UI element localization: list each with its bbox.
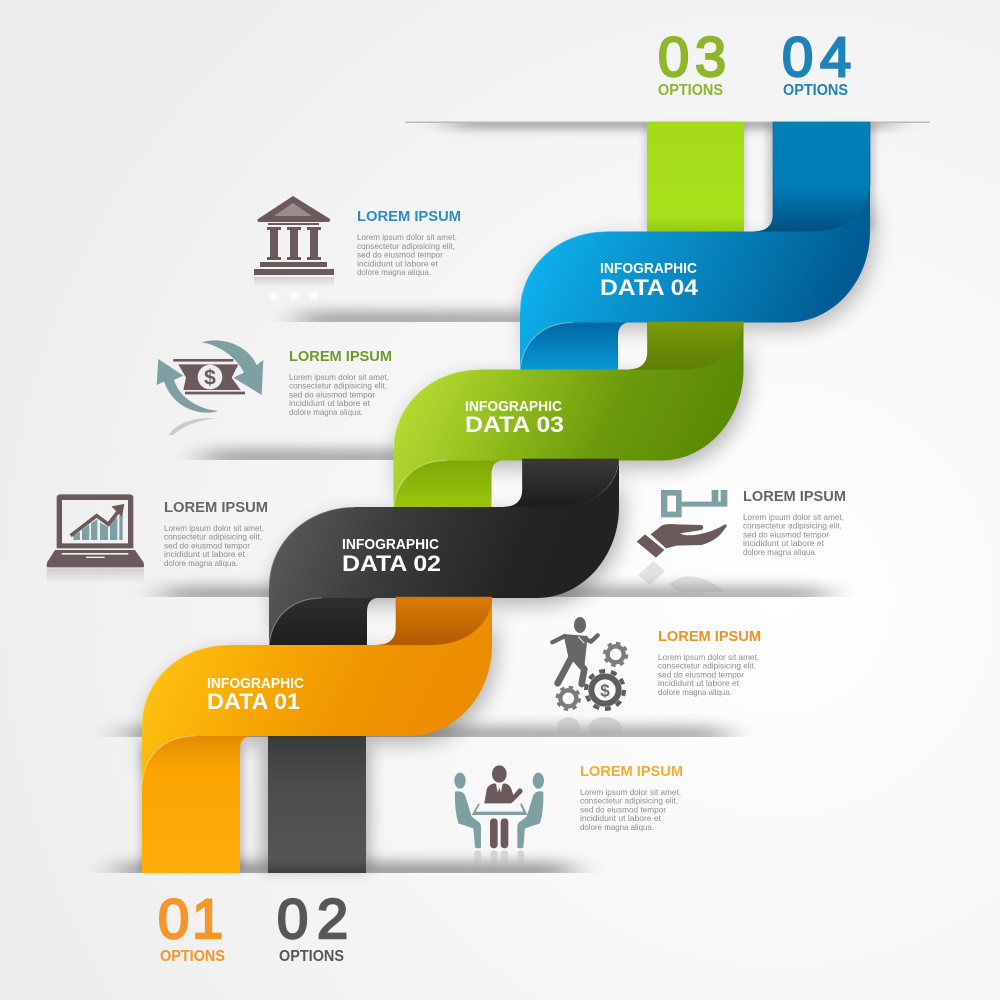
icon: hand holding key	[637, 490, 727, 592]
dark ribbon band	[269, 460, 619, 647]
dark ribbon vertical strip	[268, 736, 366, 873]
text block: green lorem ipsum: Lorem ipsum dolor sit amet,	[289, 372, 389, 382]
text block: green lorem ipsum: consectetur adipisicing elit,	[289, 381, 387, 391]
label: infographic data 02: DATA 02	[342, 551, 441, 576]
text block: orange lorem ipsum: dolore magna aliqua.	[658, 687, 732, 697]
text block: yellow lorem ipsum	[580, 764, 683, 832]
option 04 heading: OPTIONS	[783, 82, 848, 99]
option 01 heading: 01	[158, 887, 223, 950]
option 01 heading: OPTIONS	[160, 948, 225, 965]
label: infographic data 04: DATA 04	[600, 275, 699, 300]
text block: blue lorem ipsum: sed do eiusmod tempor	[357, 250, 443, 260]
green ribbon lower fold	[394, 460, 502, 510]
text block: gray lorem ipsum: incididunt ut labore et	[164, 549, 246, 559]
text block: key lorem ipsum: sed do eiusmod tempor	[743, 529, 829, 539]
green straight ribbon top	[647, 122, 744, 232]
blue ribbon band	[520, 184, 870, 372]
label: infographic data 03: INFOGRAPHIC	[465, 398, 562, 415]
text block: key lorem ipsum: LOREM IPSUM	[743, 489, 846, 505]
label: infographic data 01: INFOGRAPHIC	[207, 675, 304, 692]
text block: yellow lorem ipsum: LOREM IPSUM	[580, 764, 683, 780]
blue ribbon lower fold	[520, 322, 628, 372]
orange ribbon upper fold	[378, 597, 492, 645]
text block: orange lorem ipsum: consectetur adipisicing elit,	[658, 661, 756, 671]
dark ribbon lower fold	[269, 598, 377, 647]
icon: people meeting at table	[454, 765, 544, 867]
text block: blue lorem ipsum: LOREM IPSUM	[357, 209, 461, 225]
text block: blue lorem ipsum: consectetur adipisicing elit,	[357, 241, 455, 251]
label: infographic data 03	[465, 398, 564, 437]
green ribbon	[394, 322, 744, 510]
text block: gray lorem ipsum: sed do eiusmod tempor	[164, 540, 250, 550]
text block: key lorem ipsum: incididunt ut labore et	[743, 538, 825, 548]
label: infographic data 01	[207, 675, 304, 714]
text block: yellow lorem ipsum: consectetur adipisicing elit,	[580, 796, 678, 806]
label: infographic data 01: DATA 01	[207, 689, 300, 714]
text block: blue lorem ipsum: Lorem ipsum dolor sit amet,	[357, 232, 457, 242]
green ribbon upper fold	[630, 322, 744, 370]
text block: green lorem ipsum: incididunt ut labore et	[289, 398, 371, 408]
text block: blue lorem ipsum: dolore magna aliqua.	[357, 267, 431, 277]
text block: blue lorem ipsum	[357, 209, 461, 277]
text block: green lorem ipsum: dolore magna aliqua.	[289, 407, 363, 417]
text block: orange lorem ipsum: sed do eiusmod tempor	[658, 669, 744, 679]
icon: running man with gears: $	[600, 680, 610, 700]
label: infographic data 04	[600, 260, 699, 300]
label: infographic data 03: DATA 03	[465, 412, 564, 437]
text block: gray lorem ipsum: consectetur adipisicing elit,	[164, 532, 262, 542]
text block: gray lorem ipsum: Lorem ipsum dolor sit amet,	[164, 523, 264, 533]
icon: money bill with arrows: $	[204, 366, 216, 390]
label: infographic data 02	[342, 536, 441, 576]
text block: orange lorem ipsum: incididunt ut labore et	[658, 678, 740, 688]
blue ribbon	[520, 122, 870, 372]
option 03 heading: 03	[658, 25, 726, 88]
text block: orange lorem ipsum	[658, 629, 761, 697]
option 04 heading: 04	[782, 25, 851, 88]
option 02 heading: 02	[277, 887, 348, 950]
label: infographic data 04: INFOGRAPHIC	[600, 260, 697, 277]
text block: gray lorem ipsum: LOREM IPSUM	[164, 500, 268, 516]
icon: money bill with arrows	[157, 340, 263, 435]
text block: green lorem ipsum	[289, 349, 392, 417]
text block: yellow lorem ipsum: dolore magna aliqua.	[580, 822, 654, 832]
orange ribbon	[142, 597, 492, 873]
label: infographic data 02: INFOGRAPHIC	[342, 536, 439, 553]
option 03 heading: OPTIONS	[658, 82, 723, 99]
text block: key lorem ipsum: consectetur adipisicing elit,	[743, 521, 842, 531]
text block: key lorem ipsum	[743, 489, 846, 557]
text block: orange lorem ipsum: LOREM IPSUM	[658, 629, 761, 645]
text block: green lorem ipsum: sed do eiusmod tempor	[289, 389, 375, 399]
icon: laptop with chart	[47, 494, 144, 583]
blue ribbon upper section	[755, 122, 870, 232]
icon: running man with gears	[552, 617, 627, 740]
icon: bank building	[254, 196, 334, 299]
orange ribbon lower strip	[142, 736, 250, 873]
text block: yellow lorem ipsum: Lorem ipsum dolor sit amet,	[580, 787, 681, 797]
text block: yellow lorem ipsum: sed do eiusmod tempor	[580, 804, 666, 814]
text block: gray lorem ipsum	[164, 500, 268, 568]
option 02 heading: OPTIONS	[279, 948, 344, 965]
text block: green lorem ipsum: LOREM IPSUM	[289, 349, 392, 365]
text block: key lorem ipsum: dolore magna aliqua.	[743, 547, 817, 557]
text block: blue lorem ipsum: incididunt ut labore et	[357, 258, 439, 268]
dark ribbon	[268, 459, 619, 873]
orange ribbon band	[142, 598, 492, 785]
text block: gray lorem ipsum: dolore magna aliqua.	[164, 558, 238, 568]
text block: yellow lorem ipsum: incididunt ut labore et	[580, 813, 662, 823]
text block: orange lorem ipsum: Lorem ipsum dolor sit amet,	[658, 652, 759, 662]
green ribbon band	[394, 322, 744, 510]
text block: key lorem ipsum: Lorem ipsum dolor sit amet,	[743, 512, 844, 522]
dark ribbon upper fold	[504, 459, 618, 507]
